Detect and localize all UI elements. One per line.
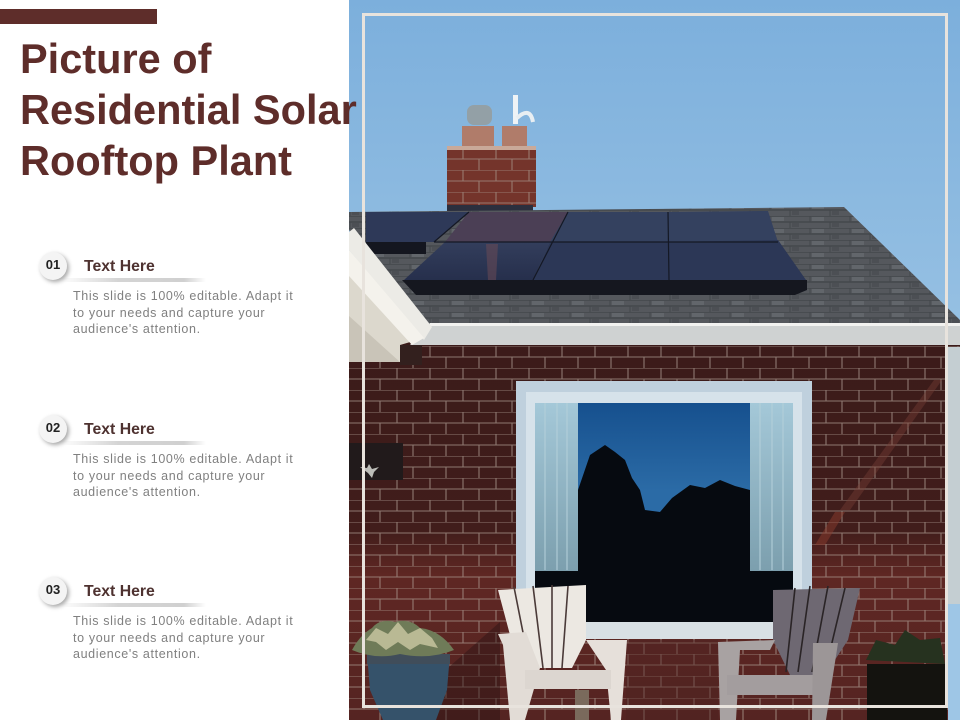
item 03: 03 [46,582,60,597]
lower wall below sill [626,640,718,720]
window [516,381,812,639]
item 02: Text Here [84,421,155,438]
item 02: 02 [46,420,60,435]
item 01: 01 [46,257,60,272]
item 01: Text Here [84,258,155,275]
brick wall [349,340,960,720]
item 03: This slide is 100% editable. Adapt it [73,614,293,628]
item 01: to your needs and capture your [73,306,265,320]
item 03 [38,576,293,661]
white frame [364,14,946,706]
planter with plant [352,621,454,720]
item 03: Text Here [84,583,155,600]
item 02: This slide is 100% editable. Adapt it [73,452,293,466]
dark plant on right [866,630,947,720]
reflected trees [578,445,750,622]
right edge downpipe [948,347,960,720]
title: Residential Solar [20,86,357,133]
item 03: to your needs and capture your [73,630,265,644]
item 02 [38,414,293,499]
title: Rooftop Plant [20,137,292,184]
solar panels [366,211,807,295]
white chair [498,585,627,720]
item 01 [38,252,293,336]
chimney [447,95,536,213]
item 03: audience's attention. [73,647,201,661]
title [20,35,357,184]
item 02: audience's attention. [73,485,201,499]
gutter and eave [349,228,960,365]
item 01: audience's attention. [73,322,201,336]
top accent bar [0,9,157,24]
curtains [535,403,793,571]
grey chair [718,586,860,720]
roof shingles [349,207,960,328]
sky [349,0,960,340]
title: Picture of [20,35,211,82]
item 01: This slide is 100% editable. Adapt it [73,289,293,303]
mailbox [349,443,403,480]
item 02: to your needs and capture your [73,468,265,482]
